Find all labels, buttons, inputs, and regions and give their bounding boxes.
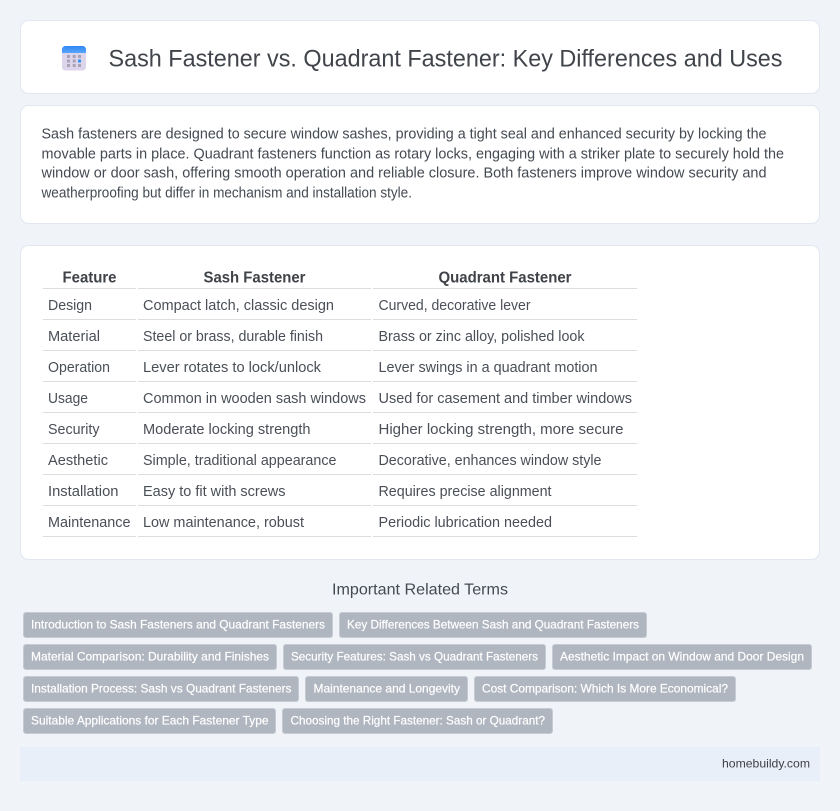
row: maintenance: Maintenance	[48, 515, 130, 531]
row: usage	[43, 391, 637, 413]
tag: Maintenance and Longevity	[314, 682, 460, 696]
row: security: Security	[48, 422, 100, 438]
row: security: Higher locking strength, more secure	[378, 422, 624, 438]
tag: Introduction to Sash Fasteners and Quadrant Fasteners	[31, 618, 325, 632]
tag: Installation Process: Sash vs Quadrant Fasteners	[31, 682, 292, 696]
tag	[282, 708, 552, 734]
row: installation: Installation	[48, 484, 118, 500]
tag	[24, 676, 298, 702]
table header: Quadrant Fastener	[438, 270, 572, 286]
row: aesthetic	[43, 453, 637, 475]
text block: introduction paragraph: Sash fasteners are designed to secure window sashes, providing a tight seal and enhanced security by locking the	[42, 126, 766, 142]
row: design	[43, 298, 637, 320]
row: security	[43, 422, 637, 444]
row: installation: Easy to fit with screws	[143, 484, 286, 500]
heading: important related terms: Important Related Terms	[332, 582, 508, 598]
row: installation: Requires precise alignment	[378, 484, 552, 500]
row: material: Brass or zinc alloy, polished look	[378, 329, 585, 345]
tag: Choosing the Right Fastener: Sash or Quadrant?	[290, 714, 545, 728]
tag	[306, 676, 468, 702]
tag: Aesthetic Impact on Window and Door Design	[560, 650, 804, 664]
row: material: Steel or brass, durable finish	[143, 329, 323, 345]
row: operation: Operation	[48, 360, 110, 376]
row: material: Material	[48, 329, 100, 345]
text block: introduction paragraph: weatherproofing but differ in mechanism and installation style.	[41, 186, 412, 202]
row: usage: Usage	[48, 391, 88, 407]
text block: introduction paragraph: window or door sash, offering smooth operation and reliable closure. Both fasteners improve window security and	[40, 166, 767, 182]
row: operation: Lever swings in a quadrant motion	[378, 360, 598, 376]
row: design: Compact latch, classic design	[143, 298, 334, 314]
row: maintenance: Periodic lubrication needed	[378, 515, 552, 531]
panel: comparison table	[20, 246, 820, 560]
tag	[24, 612, 332, 638]
tag: Material Comparison: Durability and Finishes	[31, 650, 269, 664]
title: Sash Fastener vs. Quadrant Fastener: Key Differences and Uses	[108, 46, 782, 72]
related term tags	[24, 612, 812, 734]
text block: introduction paragraph	[40, 126, 784, 202]
table header: Feature	[62, 270, 117, 286]
row: aesthetic: Simple, traditional appearance	[143, 453, 336, 469]
tag	[24, 708, 276, 734]
row: usage: Common in wooden sash windows	[143, 391, 366, 407]
tag: Key Differences Between Sash and Quadrant Fasteners	[347, 618, 639, 632]
icon: calendar	[62, 46, 86, 70]
table header: Sash Fastener	[204, 270, 306, 286]
tag: Suitable Applications for Each Fastener Type	[31, 714, 269, 728]
row: design: Design	[48, 298, 92, 314]
panel: header	[20, 20, 820, 94]
tag	[340, 612, 646, 638]
tag	[284, 644, 546, 670]
tag: Security Features: Sash vs Quadrant Fasteners	[291, 650, 538, 664]
row: maintenance	[43, 515, 637, 537]
row: operation: Lever rotates to lock/unlock	[143, 360, 322, 376]
panel: introduction	[20, 106, 820, 224]
text block: introduction paragraph: movable parts in place. Quadrant fasteners function as rotary locks, engaging with a striker plate to securely hold the	[42, 146, 784, 162]
footer source text: homebuildy.com	[722, 756, 810, 770]
row: material	[43, 329, 637, 351]
tag	[24, 644, 276, 670]
tag	[552, 644, 812, 670]
row: aesthetic: Decorative, enhances window style	[378, 453, 602, 469]
tag	[474, 676, 736, 702]
row: operation	[43, 360, 637, 382]
row: usage: Used for casement and timber windows	[378, 391, 632, 407]
tag: Cost Comparison: Which Is More Economical?	[482, 682, 728, 696]
table header	[43, 270, 637, 289]
row: maintenance: Low maintenance, robust	[143, 515, 304, 531]
row: design: Curved, decorative lever	[378, 298, 531, 314]
row: installation	[43, 484, 637, 506]
row: aesthetic: Aesthetic	[48, 453, 108, 469]
row: security: Moderate locking strength	[143, 422, 310, 438]
footer	[20, 747, 820, 781]
